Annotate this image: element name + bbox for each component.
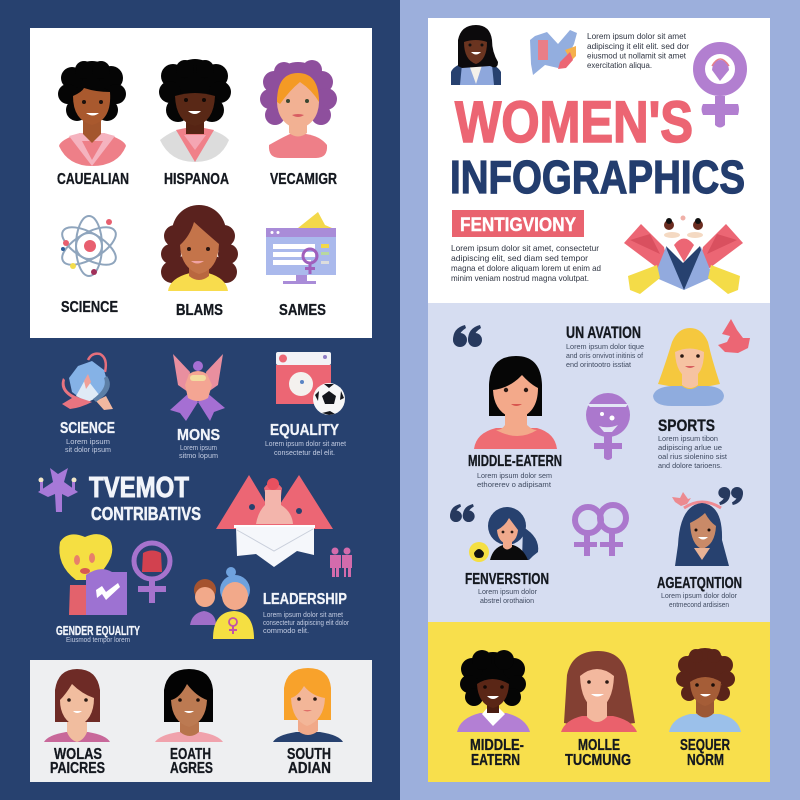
text block: minim veniam nostrud magna volutpat. bbox=[451, 273, 589, 283]
icon: small bird bbox=[672, 492, 691, 506]
portrait: wolas bbox=[44, 669, 110, 742]
label: MIDDLE- bbox=[470, 737, 524, 754]
heading: SPORTS bbox=[658, 416, 715, 435]
text block bbox=[661, 593, 738, 609]
illustration: winged figures bbox=[624, 216, 743, 294]
icon: red note bbox=[718, 319, 750, 353]
text block: consectetur adipiscing elit dolor bbox=[263, 620, 350, 627]
icon: blue map shapes bbox=[530, 30, 577, 75]
portrait: hispanic bbox=[159, 59, 231, 162]
icon: female symbol bbox=[586, 393, 630, 460]
quote mark bbox=[453, 325, 482, 347]
portrait: caucasian bbox=[58, 61, 126, 166]
text block: adipiscing arlue ue bbox=[658, 445, 722, 452]
text block: Lorem ipsum tibon bbox=[658, 436, 718, 443]
label: SEQUER bbox=[680, 737, 730, 754]
text block: adipiscing elit, sed diam sed tempor bbox=[451, 253, 588, 263]
portrait: curly brown hair bbox=[161, 205, 238, 291]
text block: Lorem ipsum bbox=[66, 439, 110, 446]
panel: lavender stories bbox=[428, 303, 770, 622]
text block bbox=[179, 445, 218, 460]
label: HISPANOA bbox=[164, 171, 229, 188]
text block bbox=[265, 441, 346, 457]
icon: double female symbol bbox=[574, 505, 626, 556]
icon: atom bbox=[57, 216, 121, 276]
label: VECAMIGR bbox=[270, 171, 337, 188]
label: SOUTH bbox=[287, 746, 331, 763]
label: NORM bbox=[687, 752, 724, 769]
portrait: eoath bbox=[155, 669, 223, 742]
text block: adipiscing it elit elit. sed dor bbox=[587, 42, 689, 51]
icon: butterfly figure bbox=[170, 354, 225, 421]
text block: and oris onvivot initinis of bbox=[566, 353, 643, 360]
heading: leadership: LEADERSHIP bbox=[263, 591, 347, 608]
text block: Lorem ipsum dolor sem bbox=[477, 473, 552, 480]
illustration: two women bbox=[190, 567, 254, 639]
text block: abstrel orothaiion bbox=[480, 598, 534, 605]
quote mark bbox=[718, 487, 743, 505]
text block: oal rius siolenino sist bbox=[658, 454, 727, 461]
label: MIDDLE-EATERN bbox=[468, 453, 562, 470]
text block: exercitation aliqua. bbox=[587, 61, 652, 70]
label: AGEATQNTION bbox=[657, 575, 742, 592]
label: MOLLE bbox=[578, 737, 620, 754]
text block: sitmo lopum bbox=[179, 453, 218, 460]
text block bbox=[478, 589, 538, 605]
icon: science globe bbox=[62, 354, 113, 410]
text block: consectetur del elit. bbox=[274, 450, 335, 457]
label: TUCMUNG bbox=[565, 752, 631, 769]
heading: mons: MONS bbox=[177, 427, 220, 444]
portrait: woman in blue bbox=[451, 25, 501, 85]
text block: Lorem ipsum dolor tique bbox=[566, 344, 644, 351]
text block: Lorem ipsum dolor sit amet bbox=[587, 32, 687, 41]
title: women's: WOMEN'S bbox=[455, 90, 693, 155]
icon: monitor bbox=[266, 212, 336, 284]
title: infographics: INFOGRAPHICS bbox=[450, 151, 745, 203]
icon: purple figure bbox=[38, 468, 78, 512]
heading: tvemot: TVEMOT bbox=[89, 472, 189, 504]
text block: Lorem ipsum dolor sit amet bbox=[263, 612, 343, 619]
portrait: hooded woman bbox=[675, 502, 729, 566]
label: PAICRES bbox=[50, 760, 105, 777]
text block: commodo elit. bbox=[263, 628, 309, 635]
portrait: ponytail bbox=[469, 507, 538, 562]
text block: Lorem ipsum dolor bbox=[478, 589, 538, 596]
text block bbox=[658, 436, 727, 470]
text block bbox=[263, 612, 350, 635]
text block bbox=[566, 344, 644, 369]
portrait: afro bbox=[457, 650, 530, 732]
left background bbox=[0, 0, 400, 800]
panel: portraits and topics bbox=[30, 28, 372, 338]
text block bbox=[65, 439, 111, 454]
icon: female symbol bbox=[699, 48, 741, 128]
heading: UN AVATION bbox=[566, 323, 641, 342]
label: EATERN bbox=[471, 752, 520, 769]
portrait: middle-eastern bbox=[474, 356, 557, 449]
text block bbox=[451, 243, 601, 283]
heading: gender equality: GENDER EQUALITY bbox=[56, 623, 140, 638]
panel: title bbox=[428, 18, 770, 303]
text block: ethorerev o adipisamt bbox=[477, 482, 551, 489]
text block: Lorem ipsum dolor sit amet bbox=[265, 441, 346, 448]
quote mark bbox=[450, 504, 475, 522]
label: ADIAN bbox=[288, 760, 331, 777]
text block: and dolore tarioens. bbox=[658, 463, 722, 470]
label: AGRES bbox=[170, 760, 213, 777]
heading: contributions: CONTRIBATIVS bbox=[91, 504, 201, 524]
text block: end orintootro isstiat bbox=[566, 362, 631, 369]
portrait: south bbox=[273, 668, 343, 742]
tag: FENTIGVIONY bbox=[460, 215, 576, 236]
text block: Lorem ipsum dolor dolor bbox=[661, 593, 738, 600]
label: CAUEALIAN bbox=[57, 171, 129, 188]
label: FENVERSTION bbox=[465, 571, 549, 588]
text block: Lorem ipsum dolor sit amet, consectetur bbox=[451, 243, 599, 253]
label: BLAMS bbox=[176, 302, 223, 319]
icon: browser and football bbox=[276, 352, 345, 415]
right background bbox=[400, 0, 800, 800]
illustration: pink triangles and envelope bbox=[216, 475, 333, 567]
label: SCIENCE bbox=[61, 299, 118, 316]
label: SAMES bbox=[279, 302, 326, 319]
text block: entmecond ardisisen bbox=[669, 602, 729, 609]
panel: bottom left portraits bbox=[30, 660, 372, 782]
heading: science: SCIENCE bbox=[60, 420, 115, 437]
icon: two people bbox=[330, 548, 352, 577]
label: WOLAS bbox=[54, 746, 102, 763]
portrait: blonde bbox=[653, 328, 724, 406]
text block: eiusmod ut nollamit sit amet bbox=[587, 52, 687, 60]
portrait: short curly bbox=[669, 648, 741, 732]
portrait: long hair bbox=[561, 651, 637, 732]
heading: equality: EQUALITY bbox=[270, 422, 339, 439]
portrait: purple hair bbox=[260, 60, 337, 158]
text block bbox=[587, 32, 689, 70]
icon: female symbol bbox=[134, 543, 170, 603]
panel: yellow portraits bbox=[428, 622, 770, 782]
text block: Eiusmod tempor lorem bbox=[66, 637, 130, 644]
text block: Lorem ipsum bbox=[180, 445, 217, 452]
illustration: yellow character with folder bbox=[59, 534, 127, 615]
label: EOATH bbox=[170, 746, 211, 763]
text block bbox=[477, 473, 552, 489]
text block: magna et dolore aliquam lorem ut enim ad bbox=[451, 263, 601, 273]
text block: sit dolor ipsum bbox=[65, 447, 111, 454]
